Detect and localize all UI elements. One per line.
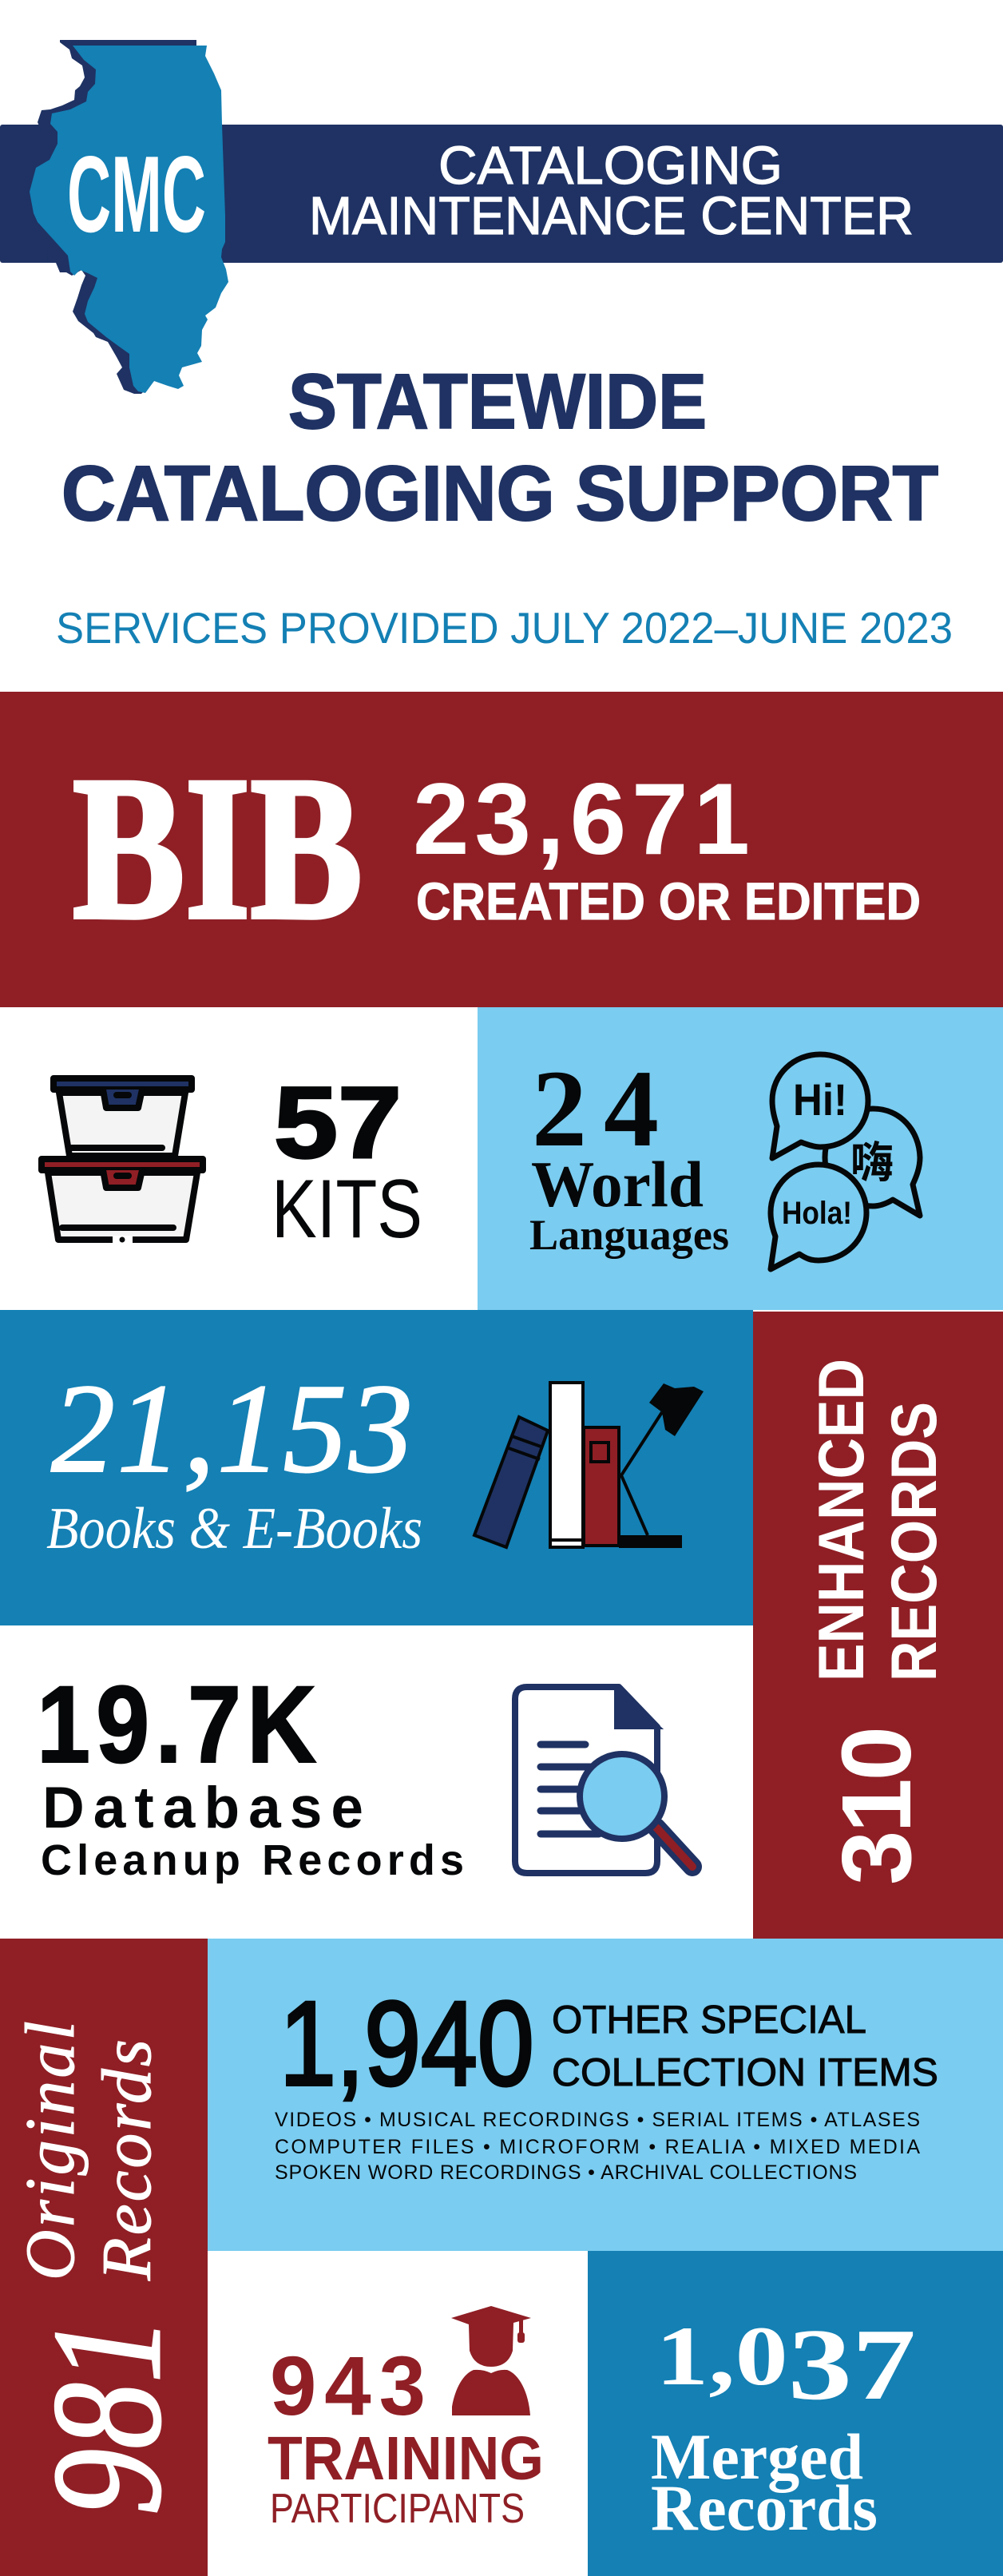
icon: Illinois state map with CMC: CMC [67,133,206,255]
special collections heading [552,1998,938,2094]
special collections heading: OTHER SPECIAL [552,1998,866,2042]
icon: speech bubbles: Hi! [793,1074,847,1125]
languages label [529,1148,729,1259]
icon: document with magnifier [515,1687,692,1873]
merged label: Merged [651,2420,863,2493]
header banner [0,40,1003,394]
languages label: Languages [529,1211,729,1259]
special collections list: COMPUTER FILES • MICROFORM • REALIA • MIXED MEDIA [275,2136,920,2158]
BIB caption: CREATED OR EDITED [416,871,921,931]
languages count: 24 [532,1047,659,1169]
original count: 981 [21,2316,193,2515]
special collections list: SPOKEN WORD RECORDINGS • ARCHIVAL COLLECTIONS [275,2161,857,2184]
enhanced label [806,1359,950,1681]
training label [268,2424,544,2532]
merged count: 37 [788,2308,916,2421]
cleanup label [41,1776,464,1884]
training count: 943 [270,2340,426,2433]
training label: TRAINING [268,2424,544,2493]
special collections list: VIDEOS • MUSICAL RECORDINGS • SERIAL ITEMS • ATLASES [275,2109,920,2131]
kits label: KITS [272,1163,422,1256]
original label [12,2021,166,2281]
special collections heading: COLLECTION ITEMS [552,2051,938,2094]
books label: Books & E-Books [46,1496,422,1562]
enhanced label: RECORDS [878,1402,950,1681]
panel: merged records [588,2251,1003,2576]
panel: original records [0,1939,208,2576]
panel: special collection items [208,1939,1003,2251]
merged label [651,2420,878,2544]
icon: graduate [451,2306,531,2415]
banner title: MAINTENANCE CENTER [309,186,914,246]
icon: speech bubbles: Hola! [782,1196,852,1231]
panel: enhanced records [753,1312,1003,1939]
icon: stacked containers [42,1078,203,1244]
main title: STATEWIDE [288,358,707,445]
panel: BIB records [0,692,1003,1007]
enhanced count: 310 [823,1726,932,1885]
cleanup label: Database [42,1776,363,1840]
kits count: 57 [274,1066,402,1179]
cleanup label: Cleanup Records [41,1836,464,1884]
merged label: Records [651,2471,878,2544]
special collections count: 1,940 [279,1977,534,2110]
panel: training participants [208,2251,588,2576]
icon: Illinois state map with CMC [30,40,228,394]
special collections list [275,2109,920,2184]
enhanced label: ENHANCED [806,1359,878,1681]
banner title: CATALOGING [438,136,783,196]
banner title [309,136,914,246]
panel: kits [0,1007,478,1310]
BIB count: 23,671 [413,762,750,875]
merged count: 1,0 [656,2309,762,2403]
original label: Records [89,2039,166,2281]
icon: books and lamp [474,1383,704,1548]
main title: CATALOGING SUPPORT [61,450,938,537]
panel: database cleanup [0,1625,753,1939]
languages label: World [531,1148,704,1221]
original label: Original [12,2021,89,2280]
icon: speech bubbles [771,1054,920,1269]
BIB wordmark: BIB [73,734,363,962]
panel: world languages [478,1007,1003,1310]
panel: books and e-books [0,1310,753,1625]
subtitle: SERVICES PROVIDED JULY 2022–JUNE 2023 [56,603,953,653]
training label: PARTICIPANTS [270,2486,525,2532]
cleanup count: 19.7K [37,1664,316,1786]
icon: speech bubbles: 嗨 [850,1139,894,1187]
main title [61,358,938,537]
books count: 21,153 [51,1357,413,1499]
